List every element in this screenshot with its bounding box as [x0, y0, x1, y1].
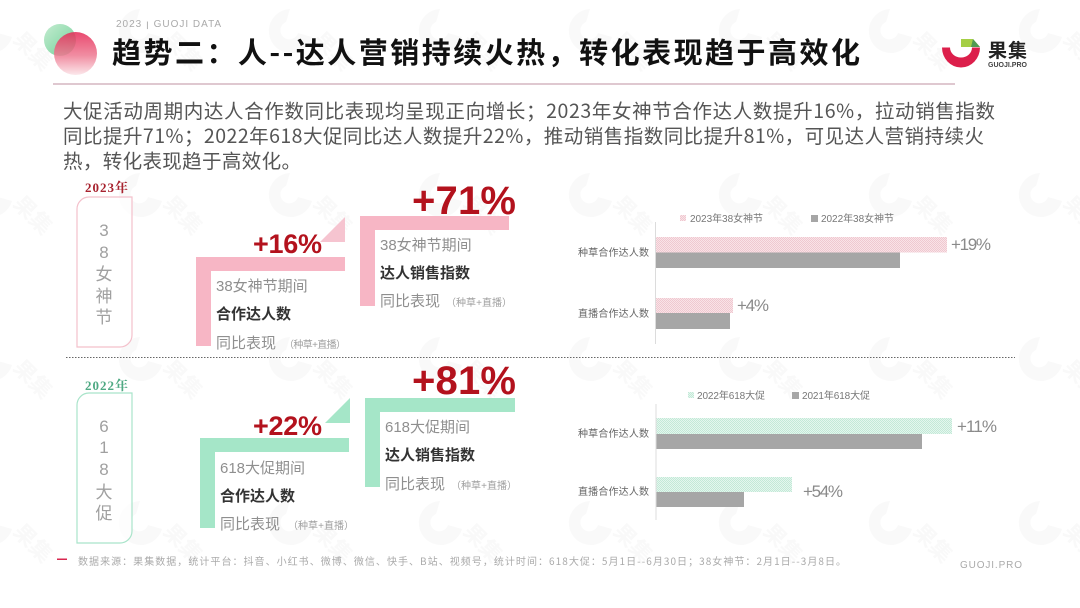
bar chart: 38女神节: 直播合作达人数 — [578, 307, 649, 320]
metric: 合作达人数 +16%: +16% — [253, 229, 322, 259]
legend: 618大促: 2022年618大促 — [697, 389, 765, 402]
metric: 合作达人数 +22%: +22% — [253, 411, 322, 441]
header eyebrow: 2023 ꞁ GUOJI DATA — [116, 19, 222, 30]
section tag: 2023 38女神节: 3 — [99, 221, 109, 240]
bar chart: 38女神节 — [578, 212, 991, 344]
legend: 38女神节: 2023年38女神节 — [690, 212, 763, 225]
brand logo: 果集 — [988, 40, 1027, 62]
bar chart: 38女神节: +19% — [951, 235, 991, 254]
intro paragraph: 同比提升71%；2022年618大促同比达人数提升22%，推动销售指数同比提升81%，可见达人营销持续火 — [63, 120, 984, 149]
footer source note: 数据来源：果集数据，统计平台：抖音、小红书、微博、微信、快手、B站、视频号，统计时间：618大促：5月1日--6月30日；38女神节：2月1日--3月8日。 — [78, 553, 846, 568]
metric: 合作达人数 +16%: 38女神节期间 — [216, 277, 308, 295]
metric: 达人销售指数 +71%: 同比表现 — [380, 293, 440, 310]
metric: 达人销售指数 +81%: （种草+直播） — [451, 479, 517, 492]
section tag: 2022 618大促: 促 — [96, 504, 112, 523]
section tag: 2022 618大促: 大 — [96, 483, 112, 502]
legend: 38女神节: 2022年38女神节 — [821, 212, 894, 225]
section tag: 2023 38女神节 — [77, 180, 132, 347]
bar chart: 38女神节: 种草合作达人数 — [578, 246, 649, 259]
intro paragraph: 大促活动周期内达人合作数同比表现均呈现正向增长；2023年女神节合作达人数提升16%，拉动销售指数 — [63, 95, 995, 124]
section tag: 2022 618大促: 6 — [99, 417, 109, 436]
section tag: 2023 38女神节: 节 — [96, 308, 112, 327]
bar chart: 618大促: 种草合作达人数 — [578, 427, 649, 440]
section tag: 2023 38女神节: 8 — [99, 243, 109, 262]
legend: 618大促 — [688, 389, 870, 402]
metric: 合作达人数 +22%: （种草+直播） — [288, 519, 354, 532]
metric: 合作达人数 +16%: （种草+直播） — [284, 338, 346, 351]
legend: 38女神节 — [680, 212, 894, 225]
section tag: 2023 38女神节: 2023年 — [85, 180, 128, 195]
header rule — [53, 83, 955, 85]
bar chart: 618大促 — [578, 389, 997, 520]
metric: 合作达人数 +16% — [196, 217, 346, 352]
intro paragraph — [63, 95, 995, 174]
header decoration: overlapping circles — [44, 24, 97, 75]
metric: 达人销售指数 +81%: 618大促期间 — [385, 419, 470, 436]
metric: 达人销售指数 +71%: 达人销售指数 — [380, 264, 470, 282]
legend: 618大促: 2021年618大促 — [802, 389, 870, 402]
section tag: 2022 618大促: 8 — [99, 460, 109, 479]
bar chart: 618大促: 直播合作达人数 — [578, 485, 649, 498]
metric: 达人销售指数 +71%: （种草+直播） — [446, 296, 512, 309]
section tag: 2023 38女神节: 女 — [96, 265, 112, 284]
metric: 合作达人数 +22%: 合作达人数 — [220, 487, 295, 505]
section tag: 2023 38女神节: 神 — [96, 287, 112, 306]
metric: 达人销售指数 +81%: 同比表现 — [385, 476, 445, 493]
metric: 达人销售指数 +71%: 38女神节期间 — [380, 236, 472, 254]
title: 趋势二：人--达人营销持续火热，转化表现趋于高效化 — [112, 30, 860, 72]
metric: 达人销售指数 +81% — [365, 359, 517, 493]
bar chart: 38女神节: +4% — [737, 296, 769, 315]
metric: 达人销售指数 +81%: +81% — [412, 359, 516, 403]
metric: 合作达人数 +16%: 合作达人数 — [216, 305, 291, 323]
metric: 合作达人数 +22%: 同比表现 — [220, 516, 280, 533]
metric: 达人销售指数 +71% — [360, 179, 516, 310]
section tag: 2022 618大促 — [77, 378, 132, 543]
metric: 合作达人数 +22%: 618大促期间 — [220, 460, 305, 477]
section tag: 2022 618大促: 2022年 — [85, 378, 128, 393]
bar chart: 618大促: +54% — [803, 482, 843, 501]
metric: 达人销售指数 +71%: +71% — [412, 179, 516, 223]
section tag: 2022 618大促: 1 — [99, 438, 109, 457]
brand logo: GUOJI.PRO — [988, 62, 1028, 69]
intro paragraph: 热，转化表现趋于高效化。 — [63, 145, 301, 174]
bar chart: 618大促: +11% — [957, 417, 997, 436]
footer brand: GUOJI.PRO — [960, 560, 1022, 571]
metric: 合作达人数 +16%: 同比表现 — [216, 335, 276, 352]
metric: 达人销售指数 +81%: 达人销售指数 — [385, 446, 475, 464]
metric: 合作达人数 +22% — [200, 398, 354, 533]
section divider — [66, 356, 1015, 358]
brand logo — [942, 39, 1028, 69]
